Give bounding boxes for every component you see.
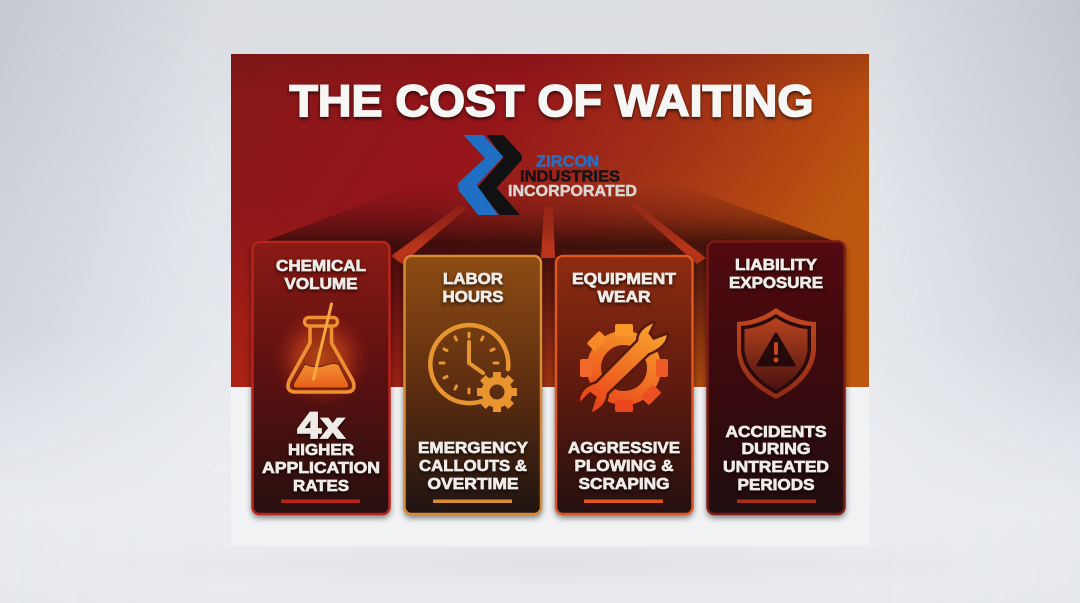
heading: labor hours: LABOR bbox=[443, 271, 503, 288]
logo text: ZIRCON bbox=[536, 154, 599, 171]
wrench bbox=[580, 323, 667, 412]
description: accidents during untreated periods: DURING bbox=[742, 441, 810, 458]
heading: labor hours bbox=[442, 271, 504, 306]
stat: 4x: 4x bbox=[298, 405, 345, 446]
icon: warning shield bbox=[737, 308, 816, 399]
funnel shadow behind logo bbox=[258, 183, 842, 387]
description: aggressive plowing and scraping: PLOWING & bbox=[574, 458, 674, 475]
panel: equipment wear bbox=[556, 256, 692, 514]
panel: labor hours bbox=[404, 256, 541, 514]
description: accidents during untreated periods: PERIODS bbox=[738, 477, 814, 494]
heading: liability exposure: LIABILITY bbox=[735, 257, 818, 274]
description: accidents during untreated periods bbox=[723, 424, 829, 494]
red panel top shade bbox=[231, 54, 869, 94]
icon: clock with gear bbox=[430, 325, 517, 412]
description: aggressive plowing and scraping bbox=[568, 440, 680, 493]
red panel lower left tint bbox=[231, 54, 869, 387]
description: higher application rates: RATES bbox=[293, 478, 349, 495]
poster board bbox=[231, 54, 869, 546]
heading: chemical volume bbox=[276, 258, 366, 293]
logo text: INDUSTRIES bbox=[520, 169, 620, 186]
panel: chemical volume bbox=[252, 242, 390, 514]
description: emergency callouts and overtime bbox=[418, 440, 529, 493]
logo chevron blue bbox=[458, 135, 503, 215]
description: emergency callouts and overtime: CALLOUTS & bbox=[419, 458, 527, 475]
heading: equipment wear: EQUIPMENT bbox=[572, 271, 677, 288]
logo chevron black bbox=[477, 135, 522, 215]
logo text: INCORPORATED bbox=[508, 183, 637, 200]
icon: flask bbox=[271, 304, 371, 408]
accent bar bbox=[584, 500, 663, 503]
description: higher application rates: APPLICATION bbox=[262, 460, 380, 477]
background side shading bbox=[0, 0, 1080, 469]
connector rays bbox=[391, 204, 706, 264]
heading: liability exposure: EXPOSURE bbox=[729, 275, 823, 292]
heading: chemical volume: VOLUME bbox=[284, 276, 358, 293]
icon: small gear bbox=[477, 372, 517, 412]
description: aggressive plowing and scraping: AGGRESSIVE bbox=[568, 440, 680, 457]
description: emergency callouts and overtime: OVERTIME bbox=[428, 476, 518, 493]
logo text bbox=[508, 154, 637, 200]
description: aggressive plowing and scraping: SCRAPING bbox=[578, 476, 670, 493]
description: emergency callouts and overtime: EMERGENCY bbox=[418, 440, 529, 457]
white lower board bbox=[231, 54, 869, 546]
icon: gear and wrench bbox=[580, 323, 668, 412]
accent bar bbox=[737, 500, 816, 503]
red gradient upper panel bbox=[231, 54, 869, 387]
company logo bbox=[458, 135, 637, 215]
title: THE COST OF WAITING bbox=[290, 77, 814, 126]
heading: chemical volume: CHEMICAL bbox=[276, 258, 366, 275]
description: accidents during untreated periods: ACCIDENTS bbox=[726, 424, 826, 441]
heading: equipment wear: WEAR bbox=[598, 289, 650, 306]
accent bar bbox=[281, 500, 360, 503]
heading: equipment wear bbox=[572, 271, 677, 306]
heading: labor hours: HOURS bbox=[442, 289, 504, 306]
heading: liability exposure bbox=[729, 257, 823, 292]
floor reflection bbox=[120, 547, 980, 603]
panel: liability exposure bbox=[708, 242, 844, 514]
accent bar bbox=[433, 500, 512, 503]
description: higher application rates: HIGHER bbox=[288, 442, 354, 459]
description: higher application rates bbox=[262, 442, 380, 495]
description: accidents during untreated periods: UNTREATED bbox=[723, 459, 829, 476]
